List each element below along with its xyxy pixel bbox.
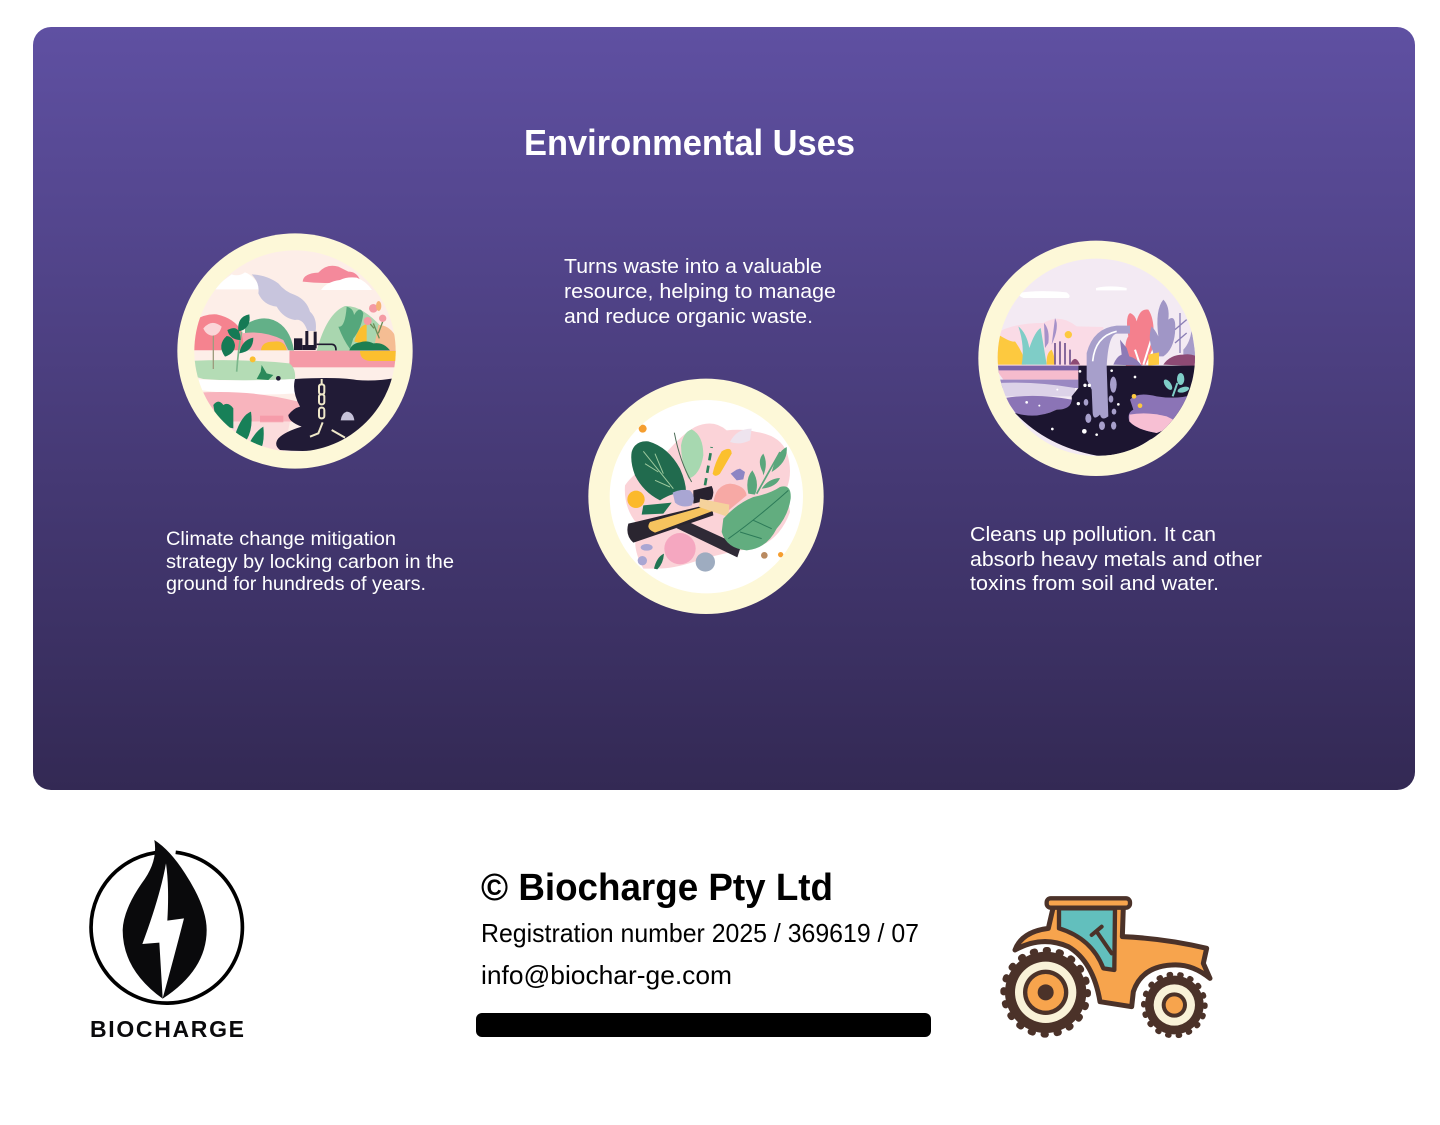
title: Environmental Uses — [524, 122, 855, 163]
registration number: Registration number 2025 / 369619 / 07 — [481, 918, 919, 948]
illustration: organic waste and charcoal — [588, 379, 824, 614]
text: pollution clean-up: Cleans up pollution. It can — [970, 524, 1216, 546]
panel: environmental uses — [33, 27, 1415, 790]
black bar — [476, 1013, 931, 1037]
text: waste management: and reduce organic waste. — [564, 306, 813, 328]
text: climate change mitigation: ground for hundreds of years. — [166, 574, 426, 595]
text: waste management: Turns waste into a valuable — [564, 256, 822, 278]
text: climate change mitigation — [166, 529, 454, 595]
logo wordmark: BIOCHARGE — [90, 1016, 244, 1042]
company name: © Biocharge Pty Ltd — [481, 867, 833, 909]
email: info@biochar-ge.com — [481, 960, 732, 990]
company details — [481, 867, 919, 990]
text: waste management — [564, 256, 836, 328]
illustration: pollution clean-up — [978, 241, 1214, 476]
text: pollution clean-up: toxins from soil and water. — [970, 573, 1219, 595]
icon: leaf and lightning bolt — [91, 840, 242, 1003]
text: waste management: resource, helping to manage — [564, 281, 836, 303]
text: climate change mitigation: Climate change mitigation — [166, 529, 396, 550]
icon: tractor — [1004, 898, 1210, 1036]
illustration: carbon locked in the ground — [177, 233, 413, 469]
logo: biocharge — [90, 840, 244, 1042]
text: pollution clean-up — [970, 524, 1262, 595]
text: pollution clean-up: absorb heavy metals and other — [970, 549, 1262, 571]
text: climate change mitigation: strategy by locking carbon in the — [166, 552, 454, 573]
